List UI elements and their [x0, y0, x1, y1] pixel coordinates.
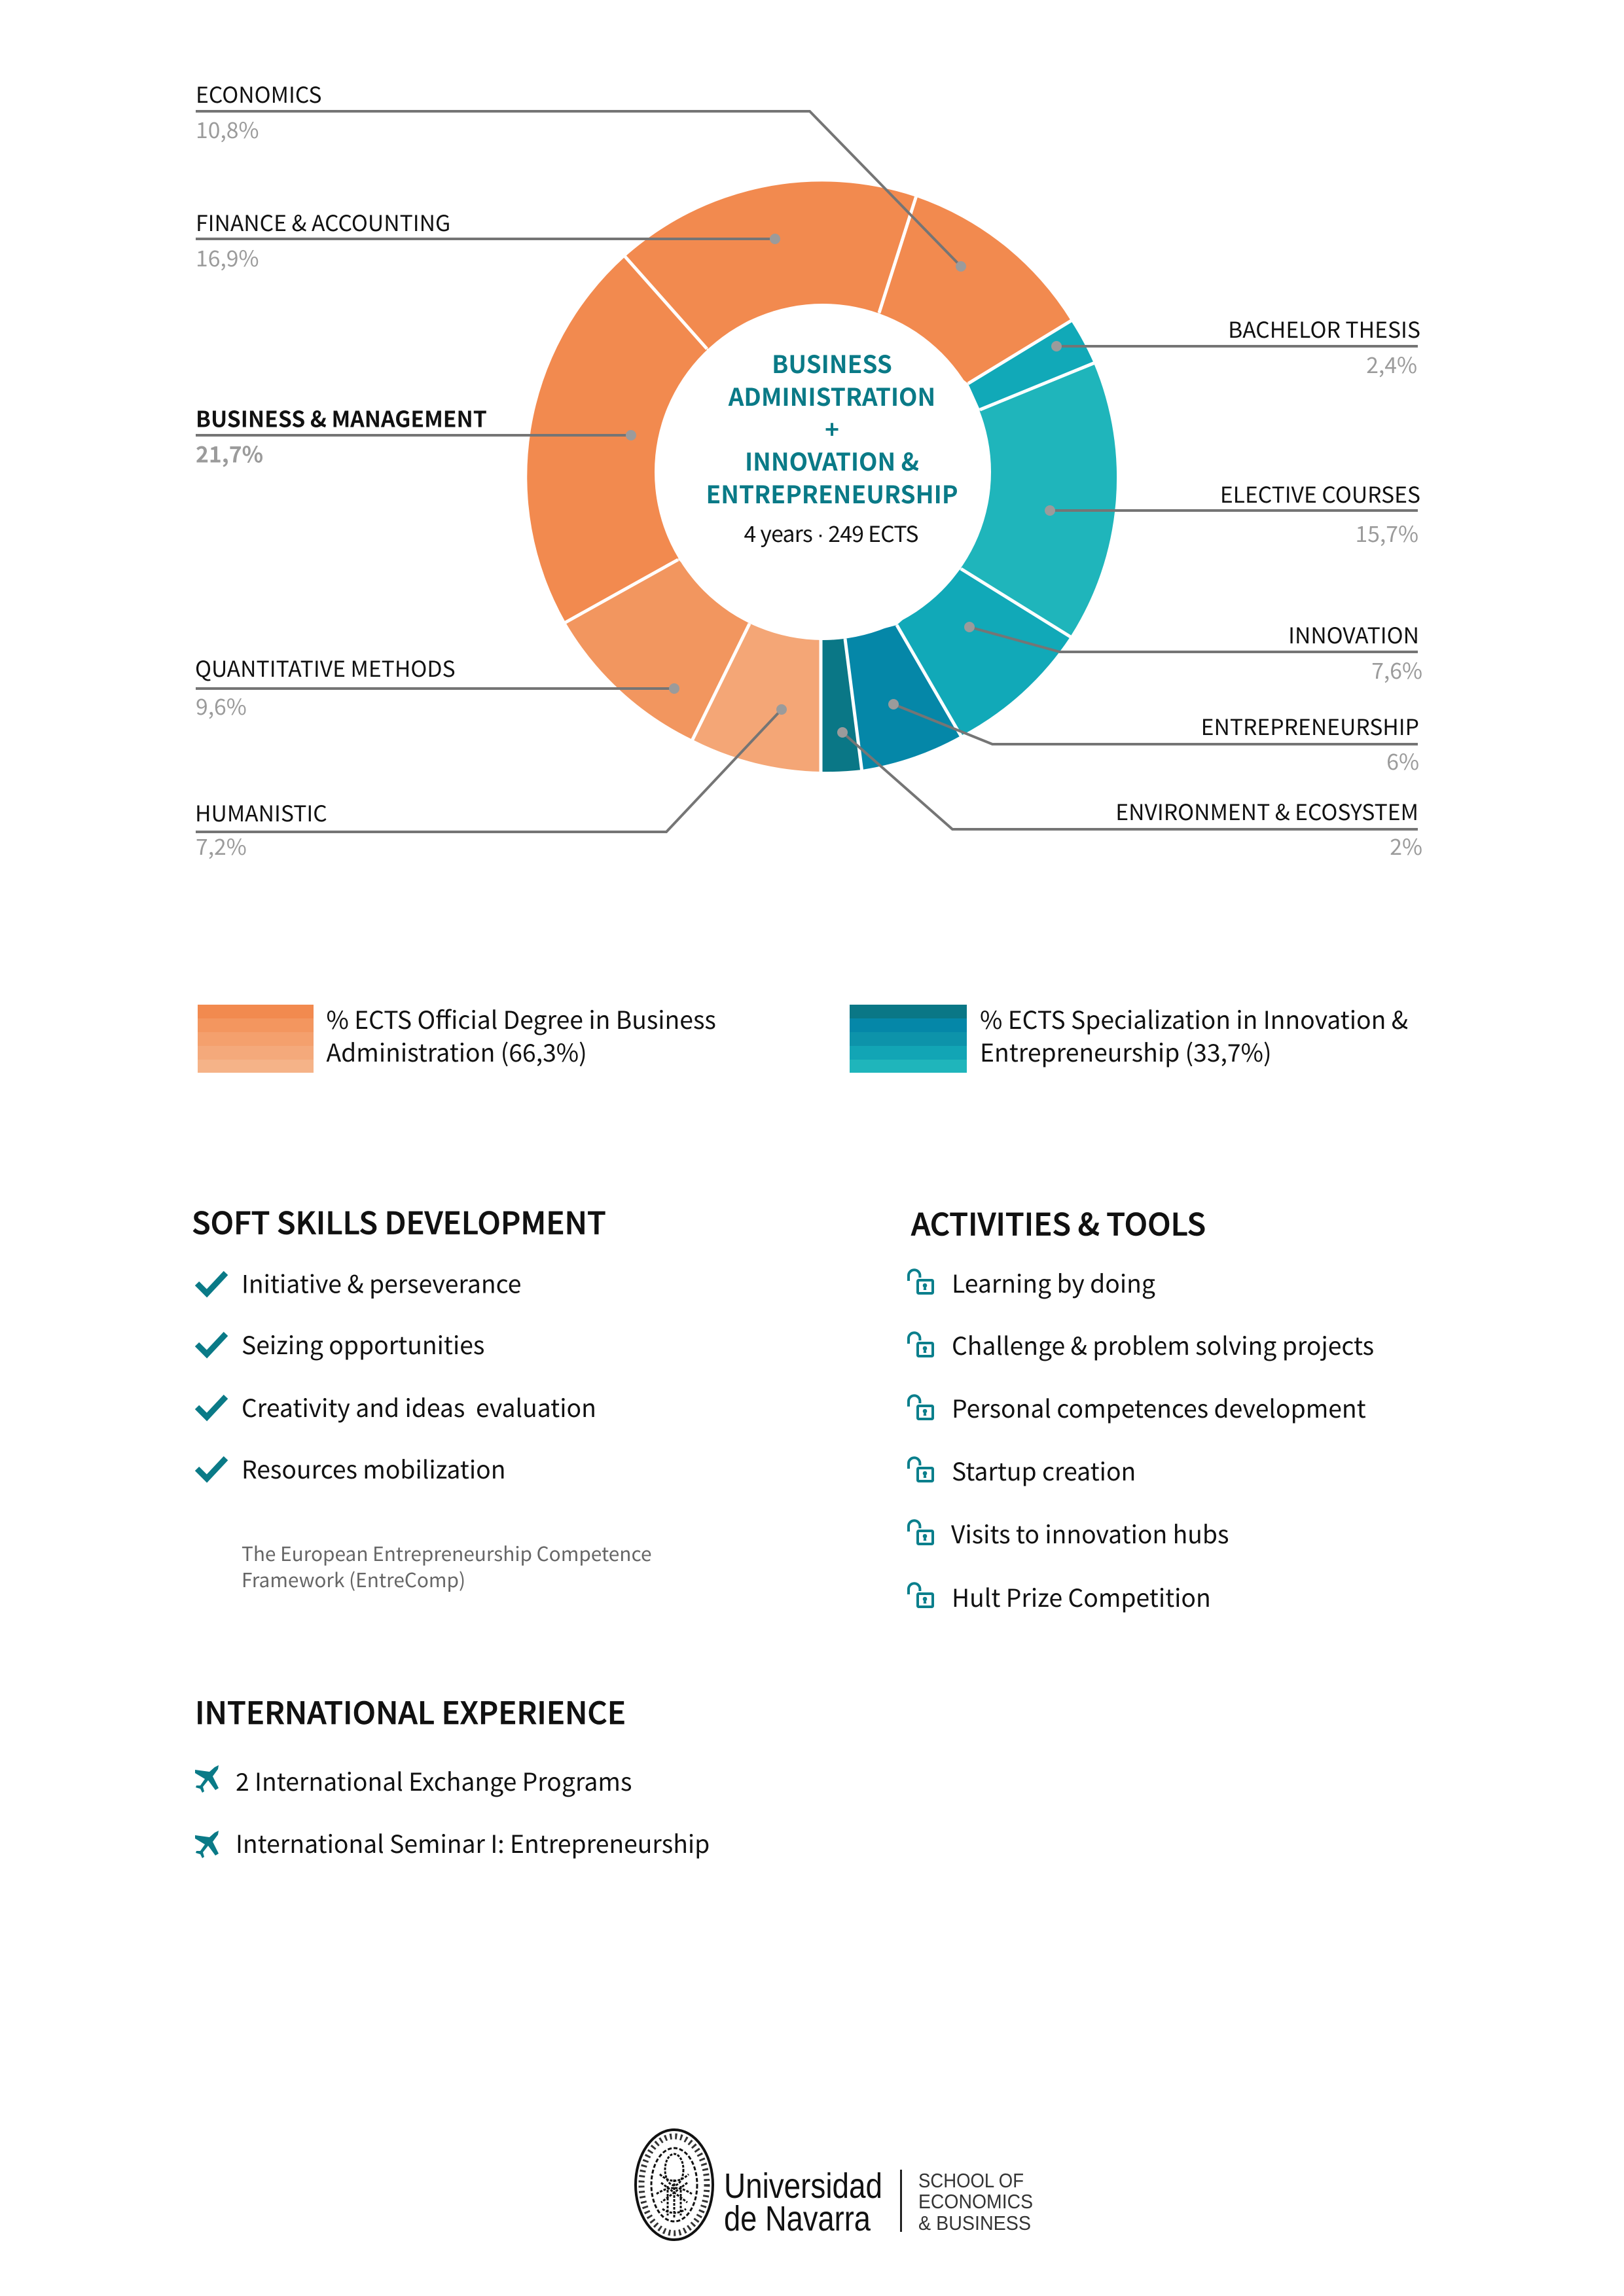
label: Economics: ECONOMICS	[196, 77, 322, 109]
list: international: International Seminar I: Entrepreneurship	[236, 1825, 710, 1860]
label: Entrepreneurship: ENTREPRENEURSHIP	[1201, 709, 1419, 742]
legend text: specialization	[980, 1001, 1408, 1069]
heading: activities: ACTIVITIES & TOOLS	[911, 1199, 1206, 1245]
segment: Finance & Accounting	[624, 181, 916, 349]
logo: Universidad de Navarra: Universidad	[724, 2166, 882, 2206]
label: Business & Management	[196, 402, 636, 469]
heading: soft skills: SOFT SKILLS DEVELOPMENT	[192, 1198, 606, 1244]
icon: lock	[909, 1583, 933, 1607]
icon: plane	[195, 1831, 219, 1858]
footnote	[242, 1538, 651, 1593]
label: Innovation: 7,6%	[1371, 653, 1422, 685]
list: activities: Challenge & problem solving projects	[952, 1327, 1374, 1362]
segment: Environment & Ecosystem	[821, 639, 862, 772]
list: soft skills: Initiative & perseverance	[242, 1265, 521, 1300]
center title: ENTREPRENEURSHIP	[706, 475, 958, 511]
label: Business & Management: 21,7%	[196, 437, 263, 469]
center title	[706, 345, 958, 548]
label: Economics	[196, 77, 966, 272]
icon: check	[197, 1397, 226, 1417]
label: Environment & Ecosystem	[837, 727, 1422, 861]
label: Innovation	[964, 618, 1422, 685]
list: activities: Hult Prize Competition	[952, 1579, 1211, 1614]
list: activities: Personal competences development	[952, 1390, 1366, 1425]
icon: check	[197, 1334, 226, 1354]
label: Economics: 10,8%	[196, 113, 259, 145]
label: Finance & Accounting: 16,9%	[196, 241, 259, 273]
segment: Bachelor Thesis	[968, 321, 1094, 410]
list: soft skills: Seizing opportunities	[242, 1326, 484, 1361]
center title: 4 years · 249 ECTS	[744, 516, 919, 548]
icon: lock	[909, 1395, 933, 1419]
center title: ADMINISTRATION	[728, 378, 935, 413]
legend text: specialization: % ECTS Specialization in Innovation &	[980, 1001, 1408, 1036]
label: Elective Courses: 15,7%	[1356, 516, 1418, 548]
label: Bachelor Thesis	[1051, 312, 1420, 380]
center title: INNOVATION &	[745, 442, 919, 478]
list: soft skills	[197, 1265, 596, 1486]
list: activities: Startup creation	[952, 1452, 1136, 1488]
list: activities: Learning by doing	[952, 1265, 1155, 1300]
list: soft skills: Resources mobilization	[242, 1450, 505, 1486]
label: Environment & Ecosystem: 2%	[1390, 829, 1422, 861]
label: Quantitative Methods	[195, 651, 679, 721]
segment: Humanistic	[693, 624, 821, 772]
donut chart	[527, 181, 1117, 774]
label: Finance & Accounting: FINANCE & ACCOUNTING	[196, 206, 450, 238]
list: international: 2 International Exchange Programs	[236, 1763, 632, 1798]
label: Environment & Ecosystem: ENVIRONMENT & ECOSYSTEM	[1115, 795, 1418, 827]
label: Innovation: INNOVATION	[1288, 618, 1419, 650]
list: soft skills: Creativity and ideas evaluation	[242, 1389, 596, 1424]
icon: lock	[909, 1520, 933, 1544]
label: Elective Courses	[1045, 477, 1420, 548]
label: Bachelor Thesis: 2,4%	[1366, 348, 1417, 380]
label: Bachelor Thesis: BACHELOR THESIS	[1228, 312, 1420, 344]
footnote: The European Entrepreneurship Competence	[242, 1538, 651, 1567]
legend: orange swatch	[198, 1005, 314, 1073]
list: activities: Visits to innovation hubs	[951, 1515, 1229, 1551]
list: international	[195, 1763, 710, 1860]
segment: Economics	[879, 197, 1071, 384]
label: Finance & Accounting	[196, 206, 780, 273]
icon: lock	[909, 1333, 933, 1356]
segment: Entrepreneurship	[845, 625, 961, 770]
segment: Innovation	[897, 569, 1070, 736]
label: Humanistic	[195, 704, 787, 861]
legend text: business administration	[326, 1001, 716, 1069]
legend text: business administration: % ECTS Official Degree in Business	[326, 1001, 716, 1036]
icon: lock	[909, 1270, 933, 1293]
icon: lock	[909, 1458, 933, 1481]
label: Business & Management: BUSINESS & MANAGEMENT	[196, 402, 487, 433]
label: Humanistic: 7,2%	[196, 829, 247, 861]
icon: seal	[636, 2130, 713, 2240]
legend text: business administration: Administration (66,3%)	[326, 1033, 587, 1069]
label: Quantitative Methods: QUANTITATIVE METHODS	[195, 651, 456, 683]
segment: Business & Management	[527, 257, 707, 622]
heading: international experience: INTERNATIONAL EXPERIENCE	[195, 1688, 626, 1733]
label: Humanistic: HUMANISTIC	[195, 796, 327, 828]
list: activities	[909, 1265, 1374, 1614]
label: Elective Courses: ELECTIVE COURSES	[1220, 477, 1420, 509]
legend: teal swatch	[850, 1005, 967, 1073]
logo: Universidad de Navarra: de Navarra	[724, 2199, 871, 2238]
logo: Universidad de Navarra: SCHOOL OF	[918, 2169, 1024, 2192]
icon: check	[197, 1458, 226, 1479]
label: Entrepreneurship: 6%	[1386, 744, 1419, 776]
logo: Universidad de Navarra: & BUSINESS	[918, 2212, 1031, 2234]
center title: BUSINESS	[772, 345, 892, 380]
label: Entrepreneurship	[888, 699, 1419, 776]
logo: Universidad de Navarra: ECONOMICS	[918, 2190, 1033, 2213]
logo: Universidad de Navarra	[636, 2130, 1033, 2240]
segment: Elective Courses	[961, 363, 1117, 637]
segment: Quantitative Methods	[566, 560, 749, 740]
icon: check	[197, 1273, 226, 1293]
center title: +	[825, 410, 839, 446]
legend text: specialization: Entrepreneurship (33,7%)	[980, 1033, 1272, 1069]
icon: plane	[195, 1765, 219, 1793]
label: Quantitative Methods: 9,6%	[196, 689, 247, 721]
footnote: Framework (EntreComp)	[242, 1564, 465, 1593]
